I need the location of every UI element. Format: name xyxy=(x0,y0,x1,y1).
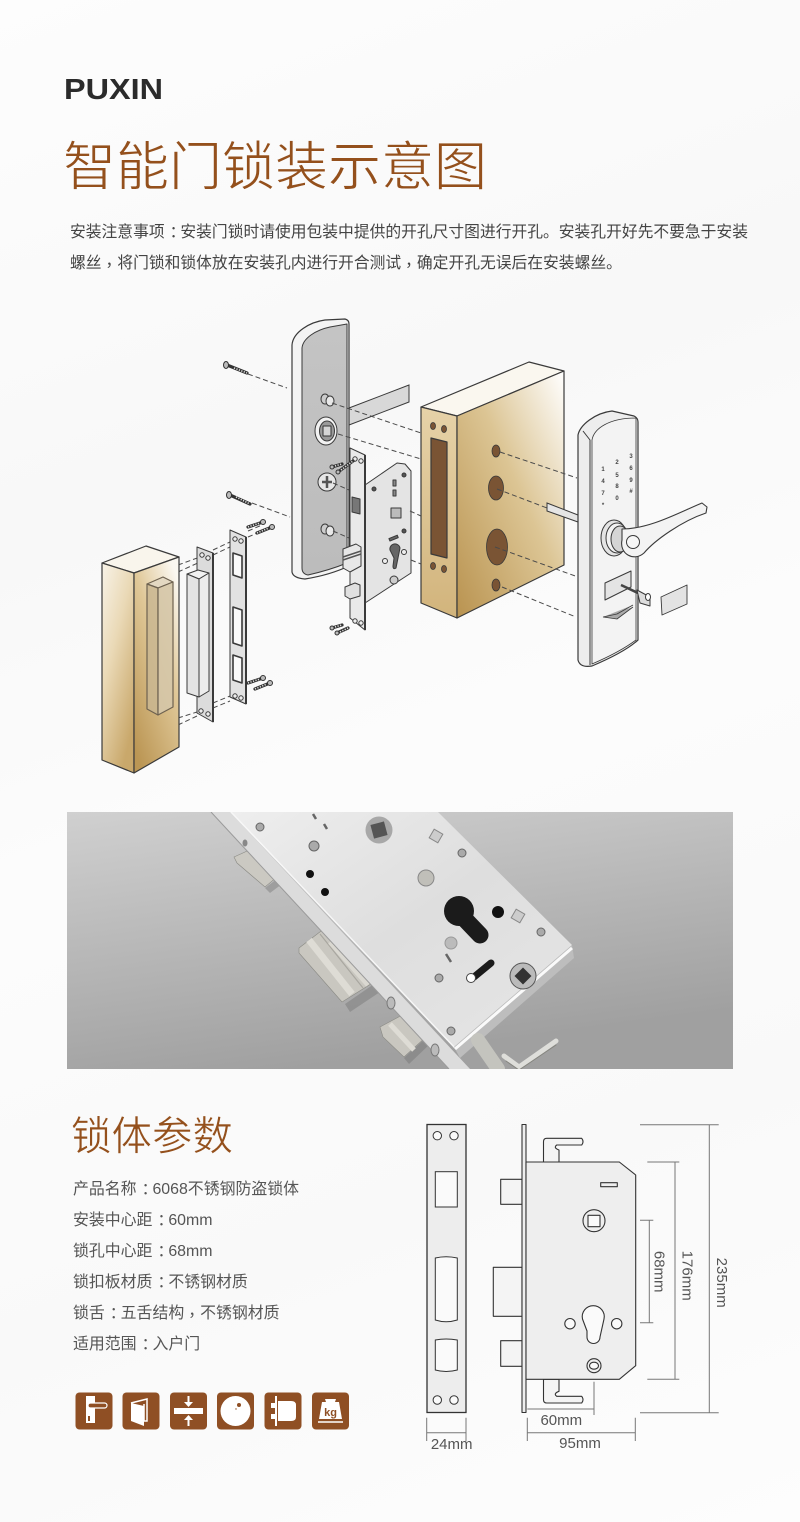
section heading: 锁体参数 xyxy=(71,1113,233,1159)
lock bolts xyxy=(234,847,426,1057)
dimension labels: 60mm xyxy=(540,1412,582,1429)
keypad xyxy=(601,454,633,509)
icon: round hole xyxy=(217,1392,254,1430)
keypad: 0 xyxy=(615,496,619,502)
specification list xyxy=(73,1180,299,1353)
exploded installation diagram xyxy=(101,318,708,774)
dimension labels: 95mm xyxy=(559,1435,601,1452)
keypad: # xyxy=(629,489,633,495)
screws xyxy=(224,362,353,689)
icon: door xyxy=(122,1392,160,1430)
keypad: * xyxy=(602,503,605,509)
dimension labels: 176mm xyxy=(678,1251,696,1301)
dimension labels: 235mm xyxy=(713,1258,730,1308)
strike plate front view xyxy=(427,1124,466,1412)
icon: weight xyxy=(312,1392,349,1430)
card reader and key xyxy=(603,571,687,619)
keypad: 1 xyxy=(601,467,605,473)
icon: thickness xyxy=(170,1392,207,1430)
strike box with plate xyxy=(187,547,213,722)
keypad: 6 xyxy=(629,466,633,472)
dimension labels xyxy=(431,1251,730,1453)
specification list: 安装中心距 ：60mm xyxy=(73,1212,212,1229)
install notes text: 安装注意事项 ：安装门锁时请使用包装中提供的开孔尺寸图进行开孔。安装孔开好先不要急于安装 xyxy=(70,224,748,241)
mortise lock body xyxy=(343,448,411,630)
lock faceplate and body xyxy=(211,812,470,1069)
smart lock front panel xyxy=(578,411,638,666)
lock holes xyxy=(242,814,545,1056)
icon: weight: kg xyxy=(324,1407,337,1419)
lock bottom hook xyxy=(478,1040,556,1070)
dimension drawing xyxy=(426,1124,730,1453)
dashed guide lines xyxy=(248,374,578,617)
keypad: 5 xyxy=(615,473,619,479)
door block xyxy=(421,362,564,618)
lock case side view xyxy=(493,1124,636,1412)
keypad: 3 xyxy=(629,454,633,460)
dimension lines xyxy=(427,1125,719,1441)
keypad: 2 xyxy=(615,460,619,466)
spindle xyxy=(547,503,578,522)
keypad: 7 xyxy=(601,491,605,497)
feature icons xyxy=(76,1392,349,1430)
strike dashed guides xyxy=(178,525,262,725)
dimension labels: 68mm xyxy=(650,1251,668,1293)
shadows xyxy=(265,878,430,1064)
specification list: 锁舌 ：五舌结构 ，不锈钢材质 xyxy=(73,1303,280,1322)
keypad: 8 xyxy=(615,484,619,490)
icon: lock body xyxy=(264,1392,302,1430)
keypad: 4 xyxy=(601,479,605,485)
left handle back plate xyxy=(292,319,349,579)
title: 智能门锁装示意图 xyxy=(63,138,487,197)
lock body photo xyxy=(67,812,733,1069)
lever handle xyxy=(601,503,707,557)
install notes text xyxy=(70,223,748,272)
specification list: 锁孔中心距 ：68mm xyxy=(73,1243,212,1260)
keypad: 9 xyxy=(629,478,633,484)
specification list: 适用范围 ：入户门 xyxy=(73,1336,200,1353)
dimension labels: 24mm xyxy=(431,1436,473,1453)
left door frame block xyxy=(102,546,179,773)
icon: door handle xyxy=(76,1392,112,1430)
strike plate xyxy=(230,530,246,704)
spindle bar xyxy=(349,385,409,425)
specification list: 产品名称 ：6068不锈钢防盗锁体 xyxy=(73,1181,299,1198)
install notes text: 螺丝 ，将门锁和锁体放在安装孔内进行开合测试 ，确定开孔无误后在安装螺丝。 xyxy=(70,253,622,272)
specification list: 锁扣板材质 ：不锈钢材质 xyxy=(73,1274,248,1291)
